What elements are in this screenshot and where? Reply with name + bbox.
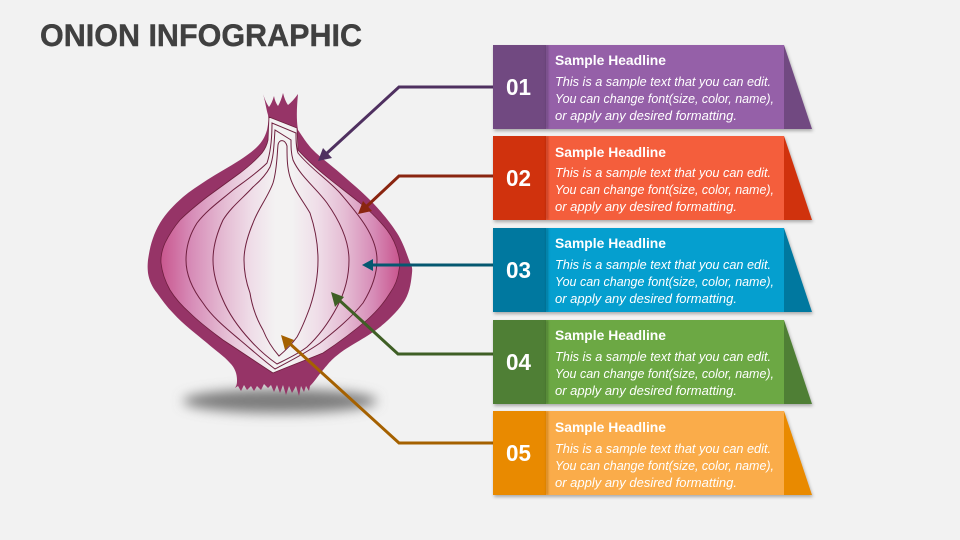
arrow 02 xyxy=(358,176,493,214)
body text 05: This is a sample text that you can edit. xyxy=(555,442,771,456)
onion outer skin xyxy=(148,93,412,396)
body text 03: You can change font(size, color, name), xyxy=(555,275,774,289)
body text 02: You can change font(size, color, name), xyxy=(555,183,774,197)
panel 01 xyxy=(493,45,812,129)
body text 03: This is a sample text that you can edit. xyxy=(555,258,771,272)
headline 01: Sample Headline xyxy=(555,52,666,68)
headline 02: Sample Headline xyxy=(555,144,666,160)
headline 05: Sample Headline xyxy=(555,419,666,435)
panel 04 xyxy=(493,320,812,404)
arrow 01 xyxy=(318,87,493,161)
body text 05: or apply any desired formatting. xyxy=(555,476,737,490)
onion layer 2 xyxy=(186,123,377,369)
body text 05: You can change font(size, color, name), xyxy=(555,459,774,473)
headline 04: Sample Headline xyxy=(555,327,666,343)
body text 01: You can change font(size, color, name), xyxy=(555,92,774,106)
onion layer 4 xyxy=(244,141,318,356)
ground shadow xyxy=(183,389,377,413)
number 01: 01 xyxy=(506,74,531,100)
onion layer 3 xyxy=(213,130,349,364)
arrow 03 xyxy=(362,259,493,271)
body text 02: This is a sample text that you can edit. xyxy=(555,166,771,180)
body text 01: This is a sample text that you can edit. xyxy=(555,75,771,89)
number 05: 05 xyxy=(506,440,531,466)
panel 03 xyxy=(493,228,812,312)
body text 04: You can change font(size, color, name), xyxy=(555,367,774,381)
panel 05 xyxy=(493,411,812,495)
panel 02 xyxy=(493,136,812,220)
arrow 05 xyxy=(281,335,493,443)
body text 02: or apply any desired formatting. xyxy=(555,200,737,214)
number 04: 04 xyxy=(506,349,531,375)
body text 04: This is a sample text that you can edit. xyxy=(555,350,771,364)
number 03: 03 xyxy=(506,257,531,283)
body text 03: or apply any desired formatting. xyxy=(555,292,737,306)
onion illustration xyxy=(148,93,412,413)
body text 01: or apply any desired formatting. xyxy=(555,109,737,123)
onion flesh xyxy=(161,117,400,373)
arrow 04 xyxy=(331,292,493,354)
number 02: 02 xyxy=(506,165,531,191)
body text 04: or apply any desired formatting. xyxy=(555,384,737,398)
title: ONION INFOGRAPHIC xyxy=(40,17,362,53)
headline 03: Sample Headline xyxy=(555,235,666,251)
